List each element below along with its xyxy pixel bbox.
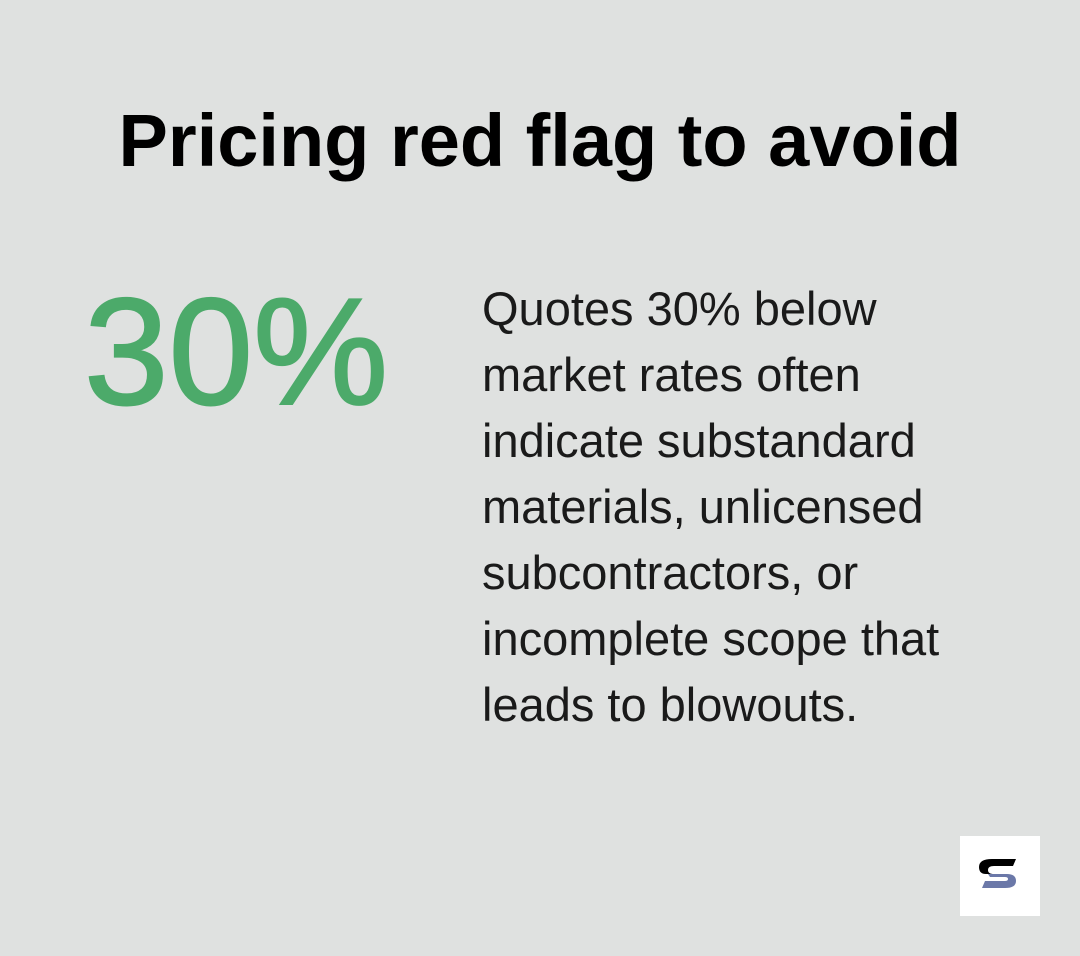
logo [960,836,1040,916]
description text: market rates often [482,348,861,401]
description text: leads to blowouts. [482,678,858,731]
description text: incomplete scope that [482,612,939,665]
description text: materials, unlicensed [482,480,924,533]
description text [482,282,939,731]
description text: subcontractors, or [482,546,858,599]
title: Pricing red flag to avoid [119,99,961,182]
description text: Quotes 30% below [482,282,877,335]
big stat: 30% [84,267,388,437]
description text: indicate substandard [482,414,916,467]
